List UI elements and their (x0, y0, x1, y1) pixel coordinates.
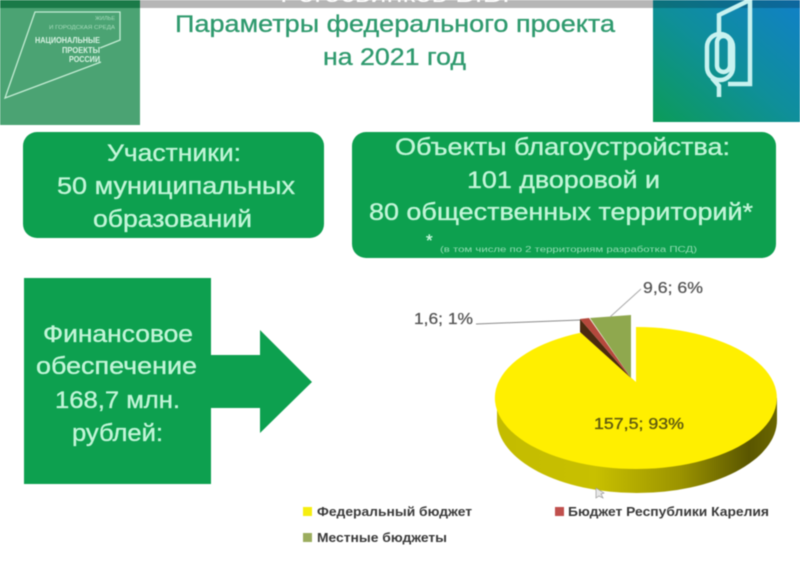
panel: improvement objects: (в том числе по 2 территориям разработка ПСД) (440, 245, 697, 254)
logo text: ЖИЛЬЕ (95, 16, 115, 22)
icon: mouse cursor (596, 488, 604, 498)
logo text: ПРОЕКТЫ (62, 45, 100, 55)
panel: financing: обеспечение (36, 353, 197, 380)
panel: participants: Участники: (107, 140, 241, 167)
title: Параметры федерального проекта (175, 11, 616, 38)
logo text: НАЦИОНАЛЬНЫЕ (35, 35, 100, 45)
pie side (497, 398, 777, 493)
legend item: republic: Бюджет Республики Карелия (568, 505, 769, 519)
logo text: РОССИИ (69, 54, 100, 64)
panel: financing: рублей: (72, 420, 163, 447)
arrow (211, 330, 312, 433)
label: republic value (414, 311, 580, 328)
legend (303, 505, 769, 545)
slice: federal budget (495, 327, 777, 469)
panel: financing: Финансовое (43, 321, 193, 348)
panel: improvement objects: * (426, 231, 433, 250)
icon: door and oval emblem (707, 0, 750, 97)
panel: improvement objects: 101 дворовой и (467, 167, 660, 194)
label: federal value: 157,5; 93% (594, 416, 684, 433)
slice: republic budget (580, 318, 631, 378)
label: local value: 9,6; 6% (643, 280, 703, 297)
panel: improvement objects: Объекты благоустройства: (395, 134, 730, 161)
label: republic value: 1,6; 1% (414, 311, 473, 328)
panel: financing (24, 278, 211, 484)
panel: gradient emblem (653, 0, 800, 122)
title (175, 11, 616, 71)
panel: improvement objects: 80 общественных территорий* (369, 199, 753, 226)
panel: participants: 50 муниципальных (57, 173, 295, 200)
panel: participants: образований (93, 206, 252, 233)
slice: local budgets (590, 315, 631, 378)
title: на 2021 год (323, 44, 466, 71)
pie chart (414, 280, 777, 493)
legend item: local: Местные бюджеты (317, 531, 447, 545)
panel: improvement objects (352, 132, 776, 258)
panel: participants (23, 132, 324, 238)
icon: logo outline (5, 12, 120, 98)
legend item: federal: Федеральный бюджет (317, 505, 472, 519)
logo text (35, 16, 115, 64)
panel: financing: 168,7 млн. (55, 387, 180, 414)
top grey band with cut-off speaker name (140, 0, 653, 8)
label: local value (610, 280, 703, 317)
logo text: И ГОРОДСКАЯ СРЕДА (49, 25, 115, 31)
panel: national projects logo (0, 0, 140, 125)
